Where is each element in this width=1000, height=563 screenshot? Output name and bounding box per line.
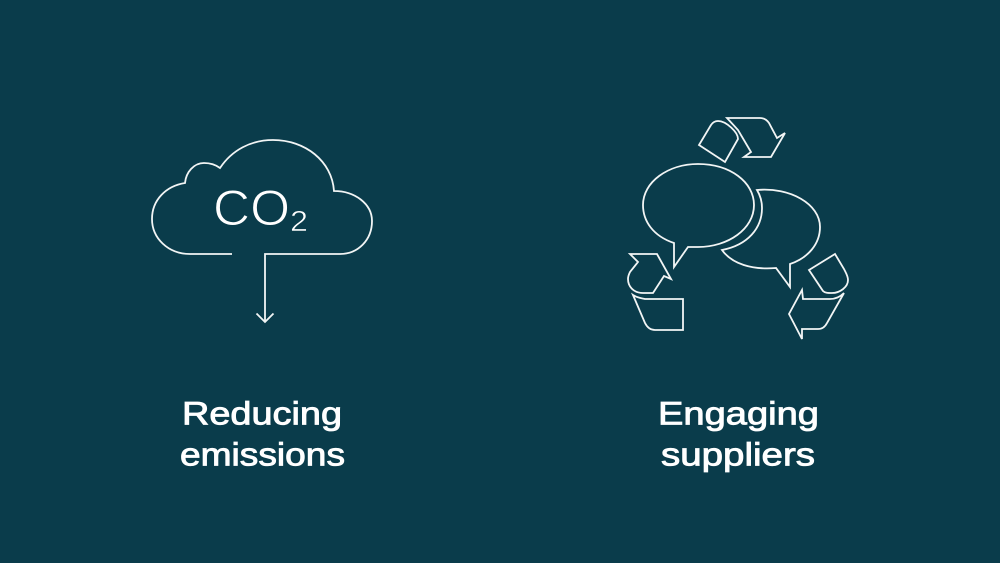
label: Reducing emissions: Reducing [182,396,342,432]
left arrow [628,254,671,293]
left arrow tail [633,295,683,330]
arrow head [256,314,274,322]
label: Engaging suppliers: Engaging [658,396,819,432]
right arrow [789,290,844,339]
left speech bubble [643,164,754,267]
CO2 label: 2 [290,206,308,238]
right arrow tail [809,254,848,293]
icon: speech bubbles inside recycling arrows [628,118,848,339]
label: Engaging suppliers [658,396,819,472]
label: Reducing emissions [180,396,345,472]
top arrow [727,118,785,157]
top arrow tail [699,121,738,162]
icon: CO2 cloud with down arrow [152,140,372,322]
CO2 label: CO [213,180,290,236]
label: Engaging suppliers: suppliers [661,436,815,472]
label: Reducing emissions: emissions [180,436,345,472]
right speech bubble [722,190,820,287]
cloud outline [152,140,372,322]
